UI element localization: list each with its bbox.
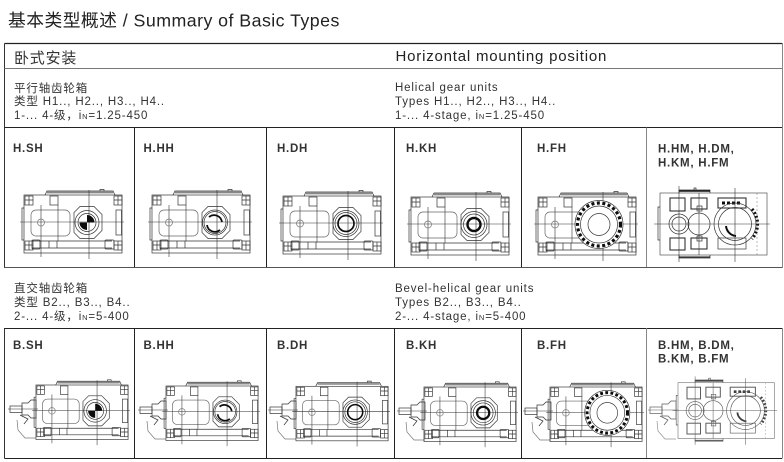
text block: bevel-helical gear units (English): 2-... 4-stage, iN=5-400 xyxy=(395,311,526,323)
panel: B.DH xyxy=(268,340,390,446)
text block: helical gear units (Chinese): 平行轴齿轮箱 xyxy=(14,81,88,95)
text block: bevel-helical gear units (Chinese): 直交轴齿轮箱 xyxy=(14,281,88,295)
text block: bevel-helical gear units (English): Bevel-helical gear units xyxy=(395,283,534,295)
drawing: H.KH gearbox xyxy=(407,192,511,261)
panel: B.DH: B.DH xyxy=(277,340,308,352)
text block: helical gear units (Chinese): 1-... 4-级，iN=1.25-450 xyxy=(14,109,148,122)
drawing: B.SH gearbox xyxy=(8,380,130,445)
panel: B.HM, B.DM, B.KM, B.FM: B.HM, B.DM, xyxy=(658,340,735,352)
text block: helical gear units (English) xyxy=(395,82,556,122)
text block: bevel-helical gear units (English): Types B2.., B3.., B4.. xyxy=(395,297,522,309)
panel: B.KH xyxy=(397,340,518,447)
drawing: H.DH gearbox xyxy=(279,190,383,260)
drawing: B.DH gearbox xyxy=(268,381,390,446)
text block: helical gear units (English): Helical gear units xyxy=(395,82,499,94)
panel: B.SH xyxy=(8,340,130,445)
heading row: Horizontal mounting position xyxy=(396,48,607,65)
drawing: B.M gearbox xyxy=(648,376,777,445)
text block: bevel-helical gear units (Chinese) xyxy=(14,281,130,323)
drawing: B.HH gearbox xyxy=(138,381,260,446)
panel: B.FH xyxy=(523,340,644,447)
panel: B.KH: B.KH xyxy=(406,340,437,352)
panel: H.FH: H.FH xyxy=(537,143,567,155)
panel: B.HM, B.DM, B.KM, B.FM xyxy=(648,340,777,445)
panel: H.KH xyxy=(406,143,511,261)
text block: helical gear units (English): 1-... 4-stage, iN=1.25-450 xyxy=(395,110,545,122)
panel: H.DH xyxy=(277,143,383,260)
panel: B.HM, B.DM, B.KM, B.FM: B.KM, B.FM xyxy=(658,354,729,366)
heading row: 卧式安装 xyxy=(14,50,77,67)
drawing: H.M gearbox xyxy=(654,186,770,262)
panel: H.KH: H.KH xyxy=(406,143,437,155)
panel: H.HM, H.DM, H.KM, H.FM xyxy=(654,144,770,262)
panel: H.HM, H.DM, H.KM, H.FM: H.HM, H.DM, xyxy=(658,144,735,156)
panel: B.FH: B.FH xyxy=(537,340,567,352)
panel: H.SH xyxy=(13,143,124,259)
panel: H.HM, H.DM, H.KM, H.FM: H.KM, H.FM xyxy=(658,158,729,170)
drawing: H.HH gearbox xyxy=(148,190,252,259)
text block: bevel-helical gear units (Chinese): 类型 B2.., B3.., B4.. xyxy=(14,295,130,309)
text block: bevel-helical gear units (English) xyxy=(395,283,534,323)
drawing: B.KH gearbox xyxy=(397,382,518,447)
heading row xyxy=(14,48,607,67)
text block: bevel-helical gear units (Chinese): 2-... 4-级，iN=5-400 xyxy=(14,310,130,323)
drawing: H.FH gearbox xyxy=(534,192,638,261)
panel: H.HH: H.HH xyxy=(144,143,175,155)
panel: B.HH xyxy=(138,340,260,446)
drawing: B.FH gearbox xyxy=(523,382,644,447)
text block: helical gear units (English): Types H1.., H2.., H3.., H4.. xyxy=(395,96,556,108)
panel: H.SH: H.SH xyxy=(13,143,43,155)
title: 基本类型概述 / Summary of Basic Types xyxy=(8,10,340,30)
text block: helical gear units (Chinese): 类型 H1.., H2.., H3.., H4.. xyxy=(14,94,165,108)
text block: helical gear units (Chinese) xyxy=(14,81,165,122)
panel: H.HH xyxy=(144,143,252,259)
panel: H.DH: H.DH xyxy=(277,143,308,155)
panel: B.SH: B.SH xyxy=(13,340,43,352)
panel: H.FH xyxy=(534,143,638,261)
panel: B.HH: B.HH xyxy=(144,340,175,352)
drawing: H.SH gearbox xyxy=(20,190,124,259)
